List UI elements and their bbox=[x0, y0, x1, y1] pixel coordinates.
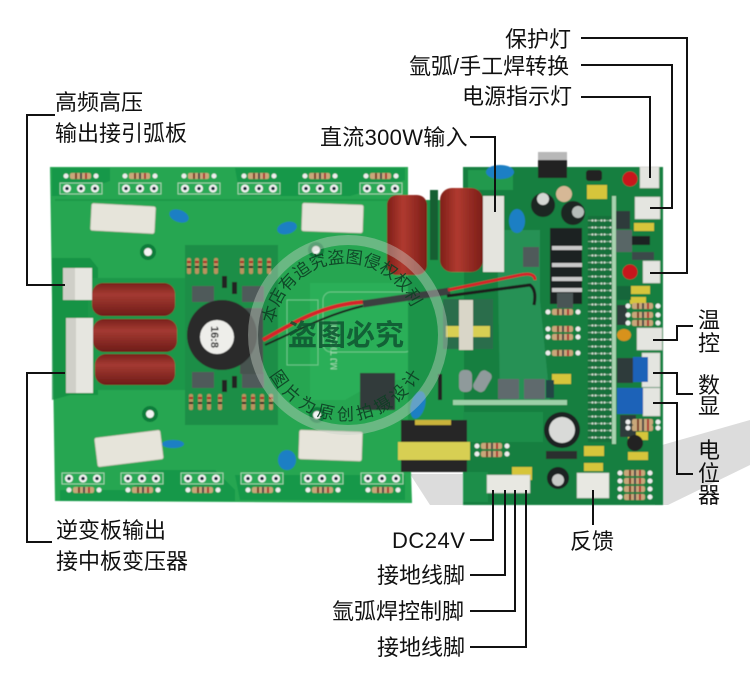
watermark ring bbox=[253, 240, 443, 430]
film capacitors bbox=[92, 283, 177, 385]
main transformer bbox=[398, 420, 470, 472]
blue capacitor bbox=[408, 165, 525, 420]
label: feedback: 反馈 bbox=[570, 529, 614, 554]
white side connectors bbox=[635, 167, 662, 416]
label: DC24V: DC24V bbox=[392, 528, 465, 553]
panel: right control board bbox=[387, 152, 663, 505]
toroid transformer: 16:8 bbox=[208, 326, 220, 348]
label: high frequency output: 输出接引弧板 bbox=[55, 121, 187, 146]
small switching transformer bbox=[443, 299, 493, 350]
board silkscreen: MJ TIG200II bbox=[329, 321, 339, 370]
label: power lamp: 电源指示灯 bbox=[462, 84, 572, 109]
large film capacitors bbox=[387, 188, 483, 275]
dark parts column bbox=[616, 211, 654, 451]
input connector bbox=[483, 196, 504, 272]
label: temperature control: 控 bbox=[698, 331, 720, 356]
mounting holes bbox=[142, 244, 323, 421]
label: digital display: 数 bbox=[698, 373, 720, 398]
label: ground pin 2: 接地线脚 bbox=[377, 635, 465, 660]
wires bbox=[263, 274, 535, 345]
watermark center text: 盗图必究 bbox=[288, 319, 404, 352]
watermark upper text: 本店有追究盗图侵权权利 bbox=[262, 249, 424, 322]
label: argon control pin: 氩弧焊控制脚 bbox=[332, 599, 464, 624]
MOSFET top bbox=[538, 152, 567, 178]
label: temperature control: 温 bbox=[698, 308, 720, 333]
indicator LEDs bbox=[622, 172, 638, 280]
electrolytic capacitors bbox=[531, 170, 602, 225]
white connectors bbox=[63, 268, 93, 393]
label: potentiometer: 位 bbox=[698, 461, 720, 486]
label: inverter output: 接中板变压器 bbox=[56, 549, 188, 574]
label: argon arc switch: 氩弧/手工焊转换 bbox=[409, 54, 569, 79]
leader lines bbox=[27, 38, 693, 647]
label: DC 300W input: 直流300W输入 bbox=[320, 125, 468, 150]
watermark lower text: 图片为原创拍摄设计 bbox=[269, 368, 420, 422]
axial daughter strip bbox=[438, 368, 567, 405]
label: digital display: 显 bbox=[698, 394, 720, 419]
label: high frequency output: 高频高压 bbox=[55, 90, 143, 115]
label: protection lamp: 保护灯 bbox=[505, 27, 571, 52]
pad outlines and vias bbox=[287, 292, 413, 365]
vertical daughter board bbox=[588, 196, 616, 444]
label: inverter output: 逆变板输出 bbox=[56, 518, 166, 543]
blue capacitors bbox=[162, 207, 298, 470]
large electrolytic capacitor bbox=[544, 412, 580, 489]
label: potentiometer: 器 bbox=[698, 483, 720, 508]
blue trimmers bbox=[617, 357, 648, 414]
resistor columns bbox=[474, 303, 660, 500]
power stage transistors bbox=[523, 228, 582, 308]
bottom connector rows bbox=[62, 473, 403, 493]
label: potentiometer: 电 bbox=[698, 438, 720, 463]
panel: left inverter board bbox=[50, 167, 463, 503]
cement resistors bbox=[90, 203, 363, 467]
yellow capacitors bbox=[512, 185, 654, 480]
background shadow bbox=[410, 420, 750, 505]
isolated MOSFET bbox=[360, 373, 395, 410]
toroid transformer bbox=[187, 300, 263, 374]
watermark stamp bbox=[248, 235, 448, 435]
bottom connectors bbox=[487, 473, 609, 498]
top connector rows bbox=[60, 173, 402, 194]
driver sub-board bbox=[185, 245, 278, 425]
circuit board photo bbox=[50, 152, 663, 505]
label: ground pin 1: 接地线脚 bbox=[377, 563, 465, 588]
